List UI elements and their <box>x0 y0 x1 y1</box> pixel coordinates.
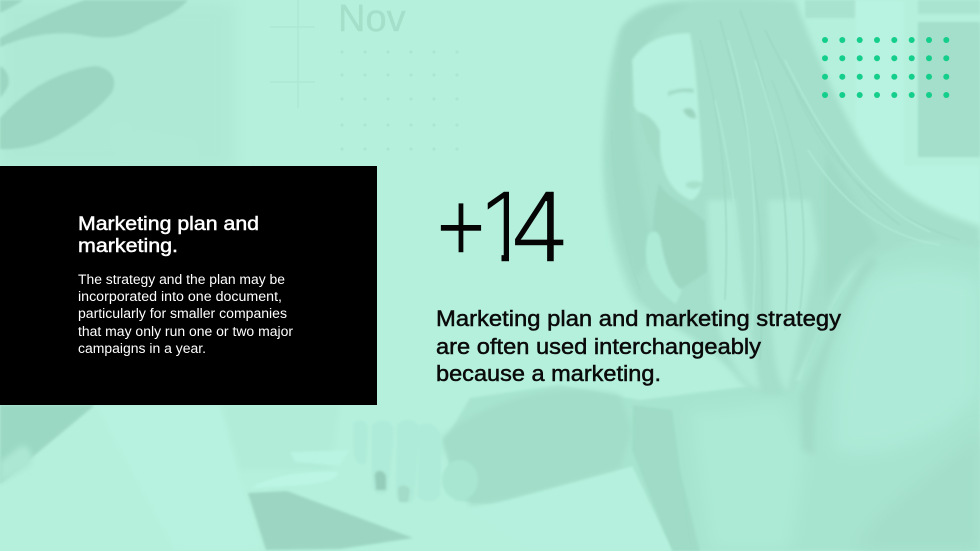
dot grid decoration <box>822 37 949 98</box>
photo: woman long hair <box>603 0 980 395</box>
big stat number: 1 <box>477 169 534 284</box>
photo: fingers holding phone <box>646 231 682 304</box>
panel: black text card <box>0 166 377 405</box>
card background <box>0 166 377 405</box>
main statement text: are often used interchangeably <box>436 334 762 359</box>
big stat number: + <box>436 169 486 284</box>
photo: woman sweater <box>440 240 980 551</box>
main statement text <box>436 306 842 386</box>
card body text: particularly for smaller companies <box>78 306 287 321</box>
photo: office wall and calendar <box>0 0 459 170</box>
main statement text: because a marketing. <box>436 361 661 386</box>
photo: phone behind the hair <box>652 183 707 295</box>
card heading <box>78 213 259 257</box>
photo: window frame and dark picture, top right <box>805 0 980 225</box>
big stat number <box>440 192 564 262</box>
big stat number: 4 <box>512 169 567 284</box>
card heading: marketing. <box>78 235 178 257</box>
photo: lower left table and laptop <box>0 405 413 551</box>
photo: plant leaves <box>0 0 198 168</box>
card body text: that may only run one or two major <box>78 324 294 339</box>
photo: woman face <box>632 33 703 200</box>
card body text: campaigns in a year. <box>78 341 206 356</box>
photo: woman hand on laptop <box>353 420 478 503</box>
card body text <box>78 272 294 356</box>
card heading: Marketing plan and <box>78 213 259 235</box>
main statement text: Marketing plan and marketing strategy <box>436 306 842 331</box>
card body text: The strategy and the plan may be <box>78 272 285 287</box>
card body text: incorporated into one document, <box>78 289 282 304</box>
